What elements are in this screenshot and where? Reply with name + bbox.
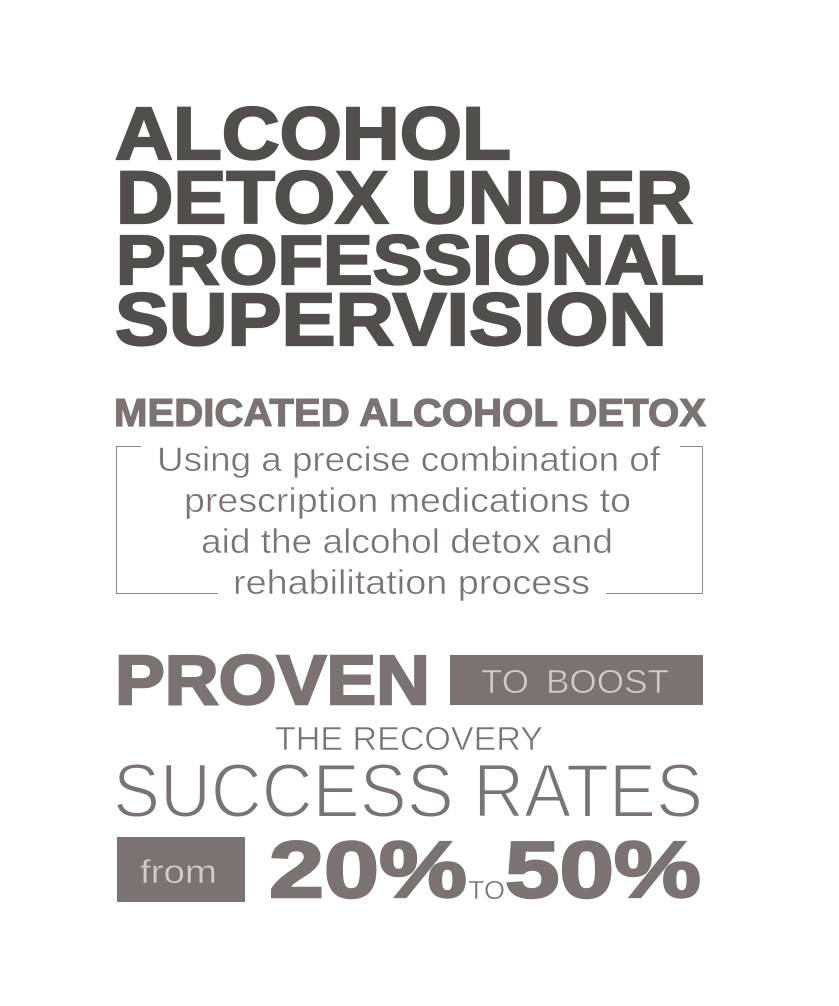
success rates: SUCCESS RATES: [113, 749, 703, 834]
badge: from: [117, 837, 245, 902]
description text: Using a precise combination of: [157, 441, 661, 479]
title: ALCOHOL: [115, 92, 511, 175]
statistic: 20%: 20%: [269, 825, 467, 914]
badge: to boost: BOOST: [546, 663, 669, 700]
description text: [157, 441, 661, 602]
badge: from: from: [140, 853, 217, 890]
title: PROFESSIONAL: [116, 221, 704, 299]
title: [115, 92, 704, 361]
bracket frame around description: [116, 446, 702, 594]
statistic: 50%: 50%: [505, 825, 701, 914]
heading: medicated alcohol detox: MEDICATED ALCOHOL DETOX: [114, 392, 706, 435]
title: SUPERVISION: [115, 278, 667, 361]
description text: prescription medications to: [184, 482, 631, 520]
proven: PROVEN: [115, 641, 430, 719]
description text: aid the alcohol detox and: [201, 523, 613, 561]
description text: rehabilitation process: [233, 564, 590, 602]
badge: to boost: [450, 655, 703, 705]
to: TO: [468, 875, 505, 905]
the recovery: THE RECOVERY: [275, 720, 543, 757]
title: DETOX UNDER: [116, 156, 693, 239]
badge: to boost: TO: [481, 663, 529, 700]
